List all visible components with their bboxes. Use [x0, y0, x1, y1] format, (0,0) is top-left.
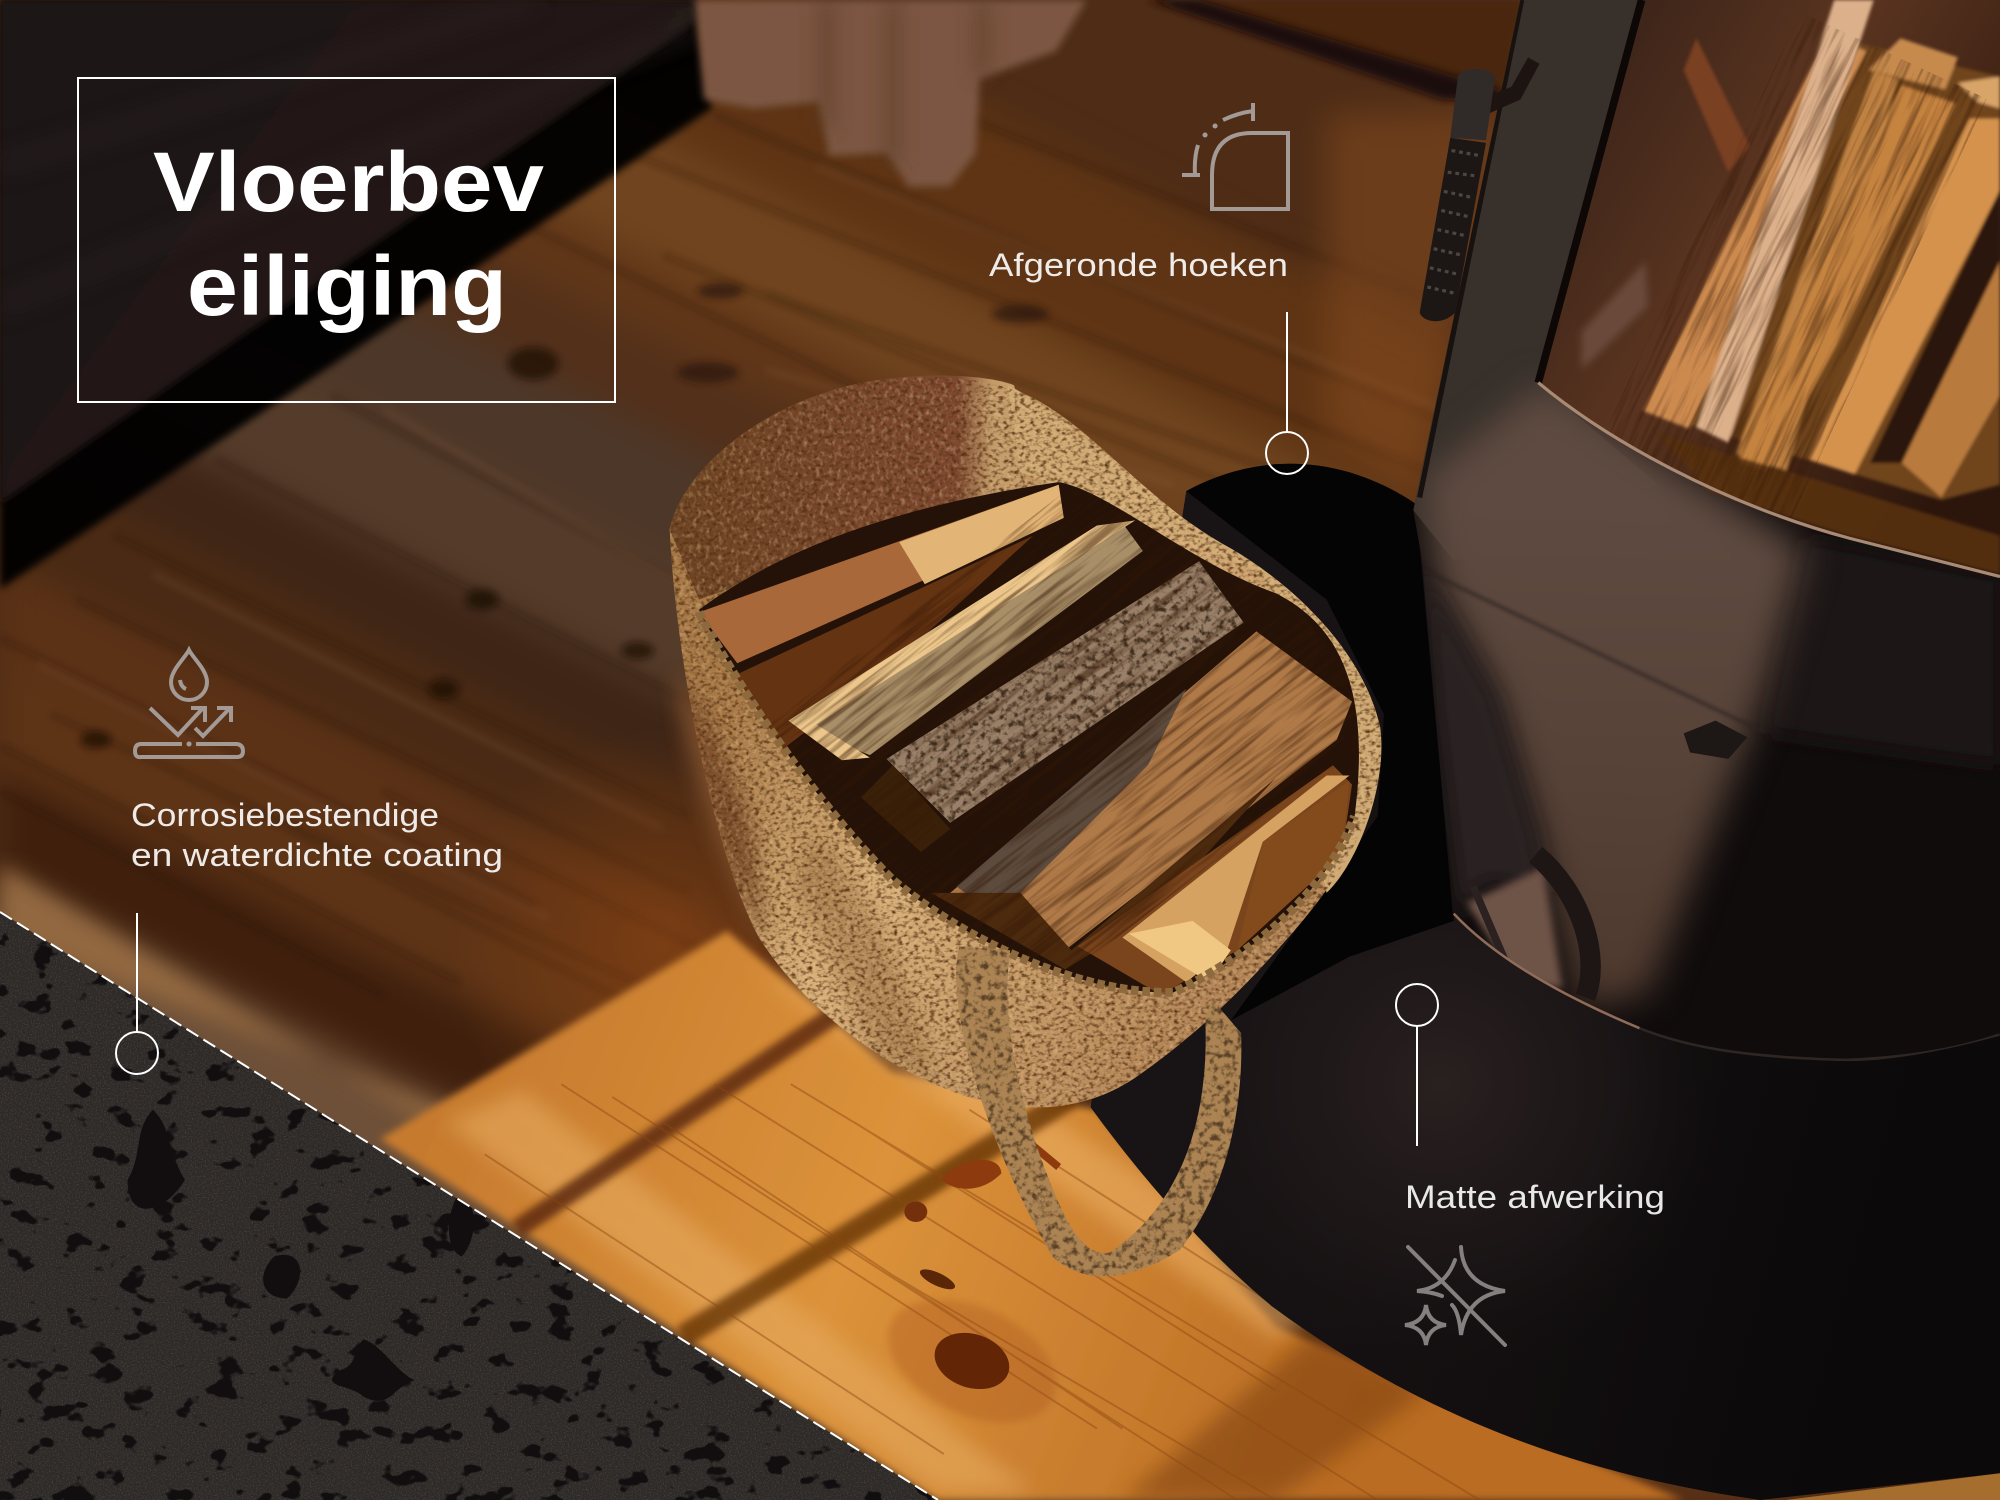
shaded wood streaks	[0, 89, 1480, 1008]
title box: Vloerbev	[153, 135, 544, 229]
dark wall and baseboard	[0, 0, 712, 589]
dashed edge of the panel	[0, 912, 938, 1500]
curtain	[695, 0, 1087, 186]
connector	[116, 913, 158, 1074]
callout: corrosiebestendige coating: en waterdichte coating	[131, 837, 503, 873]
firewood in the basket	[699, 482, 1359, 992]
grain lines	[485, 1084, 1480, 1500]
icon: water drop on surface	[135, 650, 243, 757]
window shadow bars	[517, 1001, 1071, 1337]
pale plank along the panel edge	[0, 865, 510, 1135]
label: Matte afwerking	[1405, 1179, 1665, 1215]
basket handles	[956, 946, 1242, 1276]
label: Afgeronde hoeken	[989, 247, 1288, 283]
basket front rim	[699, 612, 1355, 992]
callout: afgeronde hoeken	[989, 103, 1308, 474]
warm floor glow	[434, 727, 893, 1161]
wood knots	[1, 283, 1075, 1447]
stove body	[1413, 0, 2000, 1061]
water droplet panel	[0, 901, 944, 1500]
top back wood strip	[1084, 0, 1524, 96]
icon: crossed out sparkle	[1405, 1247, 1505, 1345]
connector	[1266, 312, 1308, 474]
sunlit floor	[380, 931, 1684, 1500]
title box: eiliging	[187, 239, 507, 333]
callout: matte afwerking	[1396, 984, 1665, 1345]
door handle	[1420, 57, 1540, 321]
connector	[1396, 984, 1438, 1146]
basket	[668, 376, 1382, 1276]
label: Corrosiebestendige	[131, 797, 439, 833]
hearth mat	[1091, 464, 2000, 1500]
title box	[78, 78, 615, 402]
icon: rounded corner	[1182, 103, 1288, 209]
glass door with firewood	[1538, 0, 2000, 577]
callout: corrosiebestendige coating	[116, 650, 503, 1074]
